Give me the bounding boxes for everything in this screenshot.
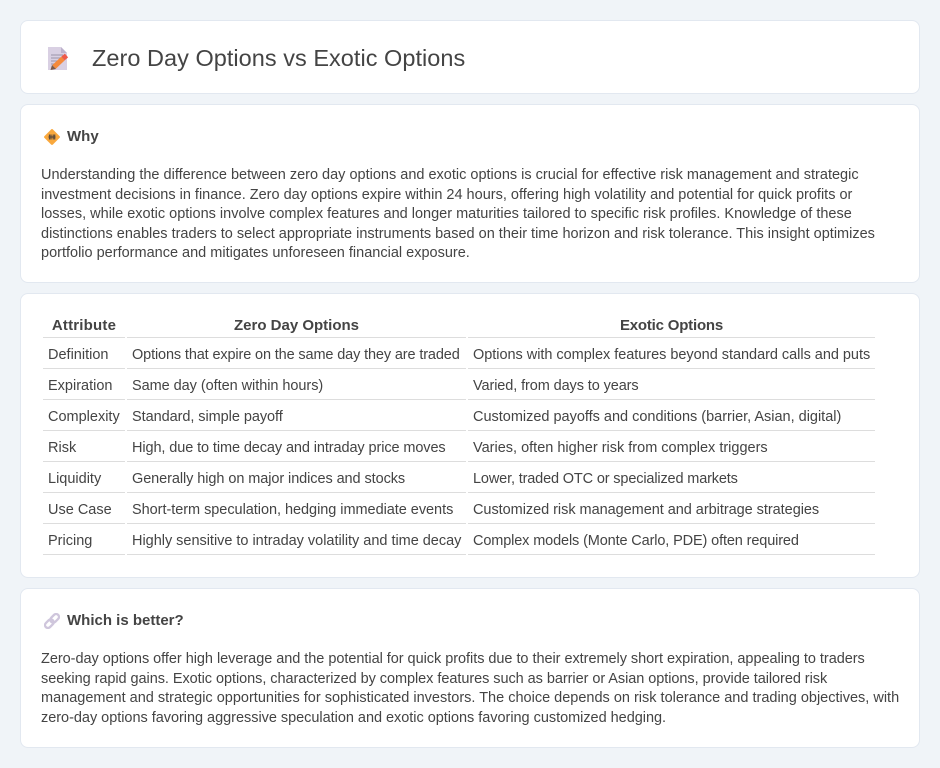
table: attribute comparison: Definition (48, 346, 108, 362)
table: attribute comparison: Attribute (52, 317, 116, 334)
table: attribute comparison: Standard, simple payoff (132, 408, 283, 424)
table: attribute comparison: Lower, traded OTC or specialized markets (473, 470, 738, 486)
text: why paragraph: distinctions enables traders to select appropriate instruments based on their time horizon and risk tolerance. This insight optimizes (41, 226, 875, 242)
heading: page title: Zero Day Options vs Exotic Options (92, 45, 465, 71)
table: attribute comparison: Expiration (48, 378, 112, 394)
table: attribute comparison: Liquidity (48, 470, 101, 486)
icon: document with pencil (48, 47, 68, 70)
text: why paragraph: investment decisions in finance. Zero day options expire within 24 hours, offering high volatility and potential for quick profits or (41, 187, 852, 203)
table: attribute comparison: Varies, often higher risk from complex triggers (473, 440, 768, 456)
table: attribute comparison: Customized payoffs and conditions (barrier, Asian, digital) (473, 408, 841, 424)
text: why paragraph: losses, while exotic options involve complex features and longer maturities tailored to specific risk profiles. Knowledge of these (41, 206, 852, 222)
table: attribute comparison (43, 317, 875, 555)
table: attribute comparison: Complexity (48, 408, 120, 424)
table: attribute comparison: High, due to time decay and intraday price moves (132, 440, 446, 456)
table: attribute comparison: Exotic Options (620, 317, 723, 334)
table: attribute comparison: Same day (often within hours) (132, 378, 323, 394)
table: attribute comparison: Pricing (48, 532, 92, 548)
table: attribute comparison: Customized risk management and arbitrage strategies (473, 502, 819, 518)
panel: why (20, 104, 920, 283)
panel: which is better (20, 588, 920, 748)
table: attribute comparison: Generally high on major indices and stocks (132, 470, 405, 486)
text: why paragraph: portfolio performance and mitigates unforeseen financial exposure. (41, 245, 470, 261)
icon: chain link (44, 613, 60, 629)
text: why paragraph: Understanding the difference between zero day options and exotic options is crucial for effective risk management and strategic (41, 167, 859, 183)
panel: title (20, 20, 920, 94)
text: which is better paragraph (41, 651, 899, 726)
table: attribute comparison: Highly sensitive to intraday volatility and time decay (132, 532, 461, 548)
heading: why: Why (67, 128, 99, 145)
table: attribute comparison: Options that expire on the same day they are traded (132, 346, 460, 362)
text: which is better paragraph: Zero-day options offer high leverage and the potential for quick profits due to their extremely short expiration, appealing to traders (41, 651, 865, 667)
table: attribute comparison: Complex models (Monte Carlo, PDE) often required (473, 532, 799, 548)
table: attribute comparison: Zero Day Options (234, 317, 359, 334)
text: which is better paragraph: seeking rapid gains. Exotic options, characterized by complex features such as barrier or Asian options, provide tailored risk (41, 671, 827, 687)
table: attribute comparison: Short-term speculation, hedging immediate events (132, 502, 453, 518)
panel: comparison table (20, 293, 920, 578)
table: attribute comparison: Varied, from days to years (473, 378, 639, 394)
table: attribute comparison: Risk (48, 440, 76, 456)
icon: warning diamond (44, 129, 60, 145)
text: which is better paragraph: zero-day options favoring aggressive speculation and exotic options favoring customized hedging. (41, 710, 666, 726)
heading: which is better: Which is better? (67, 612, 184, 629)
table: attribute comparison: Options with complex features beyond standard calls and puts (473, 346, 870, 362)
text: which is better paragraph: management and strategic opportunities for sophisticated investors. The choice depends on risk tolerance and trading objectives, with (41, 690, 899, 706)
text: why paragraph (41, 167, 875, 261)
table: attribute comparison: Use Case (48, 502, 112, 518)
